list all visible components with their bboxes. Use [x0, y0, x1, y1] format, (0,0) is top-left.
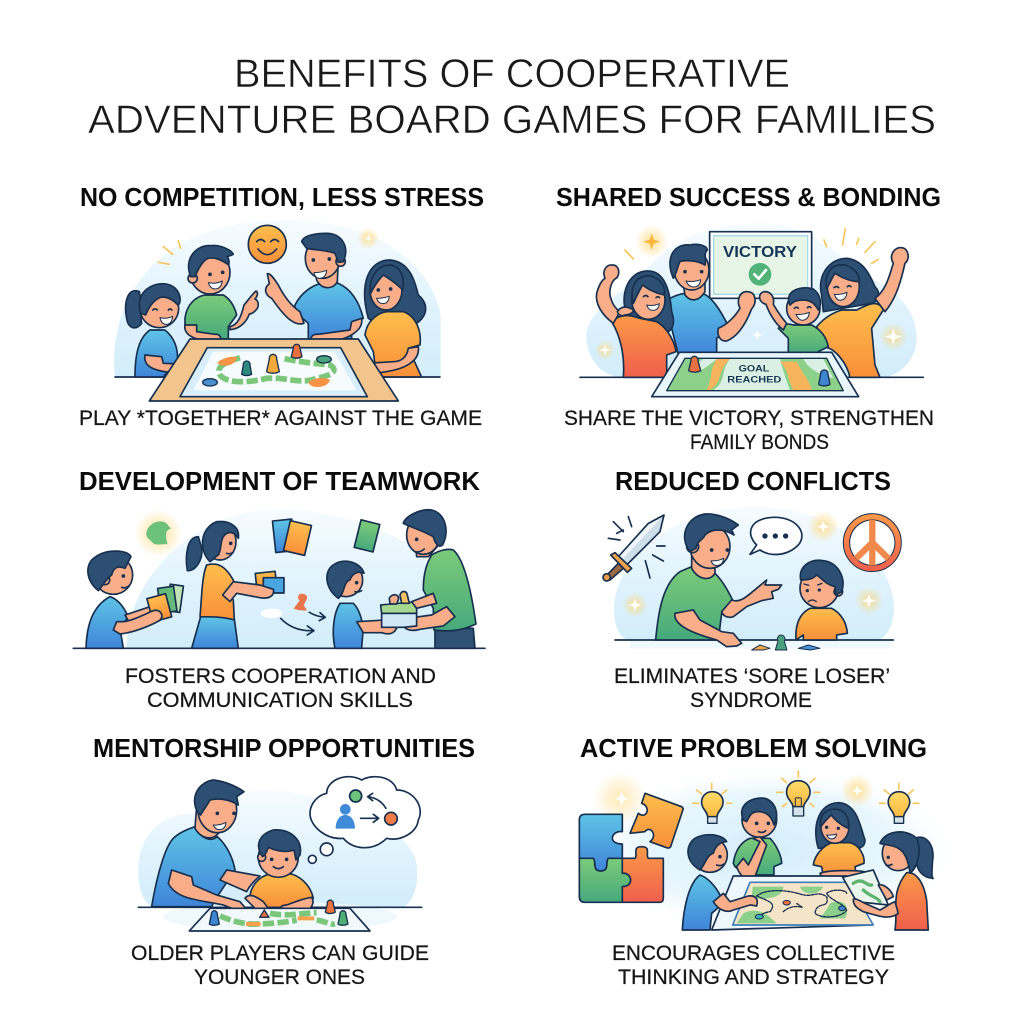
- panel: mentorship opportunities: [93, 735, 475, 989]
- illustration: family passing cards and game pieces: [73, 509, 485, 648]
- panel: development of teamwork: [73, 468, 485, 712]
- heading: SHARED SUCCESS & BONDING: [556, 184, 941, 212]
- illustration: parent calmly talking to child: [603, 507, 901, 650]
- panel: reduced conflicts: [603, 468, 901, 712]
- caption: PLAY *TOGETHER* AGAINST THE GAME: [79, 406, 482, 430]
- illustration: family celebrating victory: GOAL: [739, 363, 770, 373]
- title: BENEFITS OF COOPERATIVE: [234, 52, 790, 96]
- panel: no competition, less stress: [79, 184, 484, 430]
- person: boy in green thinking: [733, 798, 782, 879]
- heading: DEVELOPMENT OF TEAMWORK: [79, 468, 481, 496]
- man in green shirt: [656, 514, 782, 647]
- caption: [564, 406, 934, 454]
- icon: puzzle pieces: [579, 793, 683, 902]
- person: woman in yellow: [813, 803, 865, 877]
- illustration: family celebrating victory: REACHED: [727, 374, 782, 384]
- illustration: family solving a map puzzle: [579, 767, 957, 933]
- map: [733, 882, 873, 925]
- father's arms: [168, 870, 260, 914]
- victory sign: [710, 232, 812, 298]
- floating cards: [272, 519, 380, 555]
- game board: [189, 900, 370, 931]
- caption: OLDER PLAYERS CAN GUIDE: [131, 941, 429, 965]
- icon: sword: [603, 515, 665, 581]
- heading: ACTIVE PROBLEM SOLVING: [580, 735, 927, 763]
- caption: FOSTERS COOPERATION AND: [125, 664, 436, 688]
- thought bubble: [308, 777, 420, 863]
- game pieces on table: [752, 635, 820, 650]
- caption: SYNDROME: [690, 688, 812, 712]
- girl with cards: [186, 521, 284, 648]
- caption: ELIMINATES ‘SORE LOSER’: [614, 664, 890, 688]
- man holding box: [381, 510, 476, 648]
- caption: ENCOURAGES COLLECTIVE: [612, 941, 895, 965]
- child: [245, 830, 313, 915]
- caption: SHARE THE VICTORY, STRENGTHEN: [564, 406, 934, 430]
- boy with cards: [86, 551, 183, 648]
- person: girl in orange with map: [843, 832, 933, 930]
- heading: REDUCED CONFLICTS: [615, 468, 891, 496]
- panel: active problem solving: [579, 735, 957, 989]
- illustration: father guiding child at board game: [138, 777, 422, 932]
- caption: [612, 941, 895, 989]
- title: ADVENTURE BOARD GAMES FOR FAMILIES: [88, 98, 936, 142]
- caption: YOUNGER ONES: [194, 965, 365, 989]
- caption: COMMUNICATION SKILLS: [147, 688, 413, 712]
- sad child: [796, 560, 847, 640]
- heading: MENTORSHIP OPPORTUNITIES: [93, 735, 475, 763]
- caption: THINKING AND STRATEGY: [618, 965, 889, 989]
- icon: peace symbol: [843, 514, 901, 572]
- table: [712, 876, 872, 930]
- icon: light bulb centre: [777, 771, 820, 816]
- icon: light bulb left: [693, 783, 732, 823]
- father: [152, 780, 244, 907]
- illustration: family celebrating victory: [580, 223, 923, 397]
- boy receiving box: [327, 561, 397, 648]
- game piece and arrows: [261, 594, 325, 635]
- title: [88, 52, 936, 142]
- person: boy in blue: [682, 835, 757, 930]
- caption: FAMILY BONDS: [690, 430, 829, 454]
- heading: NO COMPETITION, LESS STRESS: [80, 184, 484, 212]
- caption: [125, 664, 436, 712]
- victory sign: VICTORY: [723, 244, 797, 261]
- panel: shared success and bonding: [556, 184, 941, 454]
- speech bubble: [750, 517, 802, 554]
- caption: [131, 941, 429, 989]
- illustration: family at a board game table: [114, 220, 441, 401]
- icon: light bulb right: [879, 783, 919, 823]
- caption: [614, 664, 890, 712]
